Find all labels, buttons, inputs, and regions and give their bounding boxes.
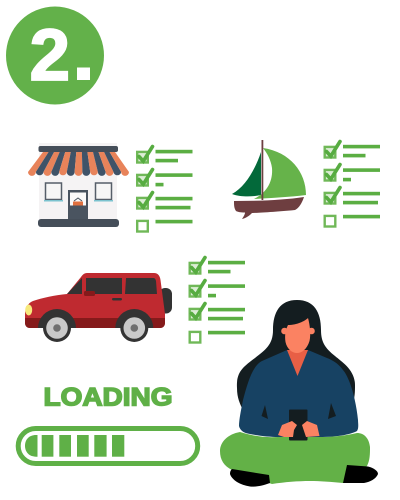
icon: sailboat bbox=[232, 140, 306, 219]
checklist: car bbox=[190, 258, 245, 342]
blazer bbox=[239, 350, 358, 437]
hands bbox=[278, 421, 320, 437]
phone bbox=[289, 410, 308, 440]
checklist: shop bbox=[137, 146, 192, 232]
awning bbox=[28, 152, 129, 176]
loading label: LOADING bbox=[44, 384, 172, 412]
checklist: sailboat bbox=[325, 142, 380, 226]
number badge bbox=[6, 6, 104, 104]
sleeve folds bbox=[262, 403, 336, 419]
hair bbox=[237, 300, 355, 410]
shop door bbox=[68, 190, 88, 220]
legs bbox=[220, 432, 370, 484]
rear wheel bbox=[115, 309, 153, 342]
icon: car bbox=[25, 273, 172, 342]
shoes bbox=[230, 465, 378, 487]
loading bar bbox=[18, 428, 198, 464]
icon: shop bbox=[28, 143, 129, 227]
person with phone bbox=[220, 300, 378, 487]
shop windows bbox=[44, 183, 113, 202]
face bbox=[281, 318, 315, 353]
front wheel bbox=[38, 309, 76, 342]
number badge: 2 bbox=[30, 15, 70, 96]
shirt bbox=[287, 350, 308, 376]
